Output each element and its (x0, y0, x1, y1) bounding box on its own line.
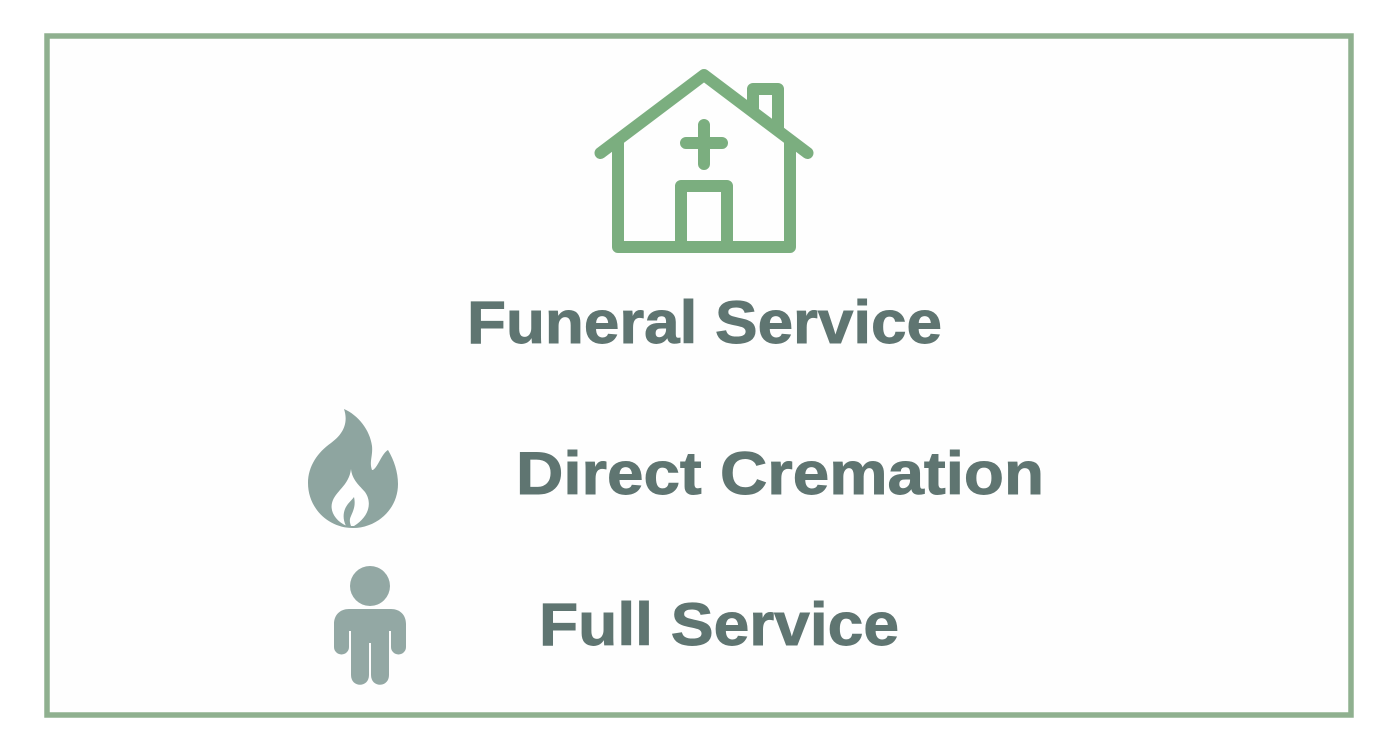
icon: flame (308, 409, 398, 528)
icon: person (334, 566, 406, 685)
icon: funeral home house with cross (600, 75, 808, 247)
label: Full Service: Full Service (539, 591, 899, 658)
heading: Funeral Service: Funeral Service (467, 289, 942, 356)
label: Direct Cremation: Direct Cremation (516, 440, 1044, 507)
